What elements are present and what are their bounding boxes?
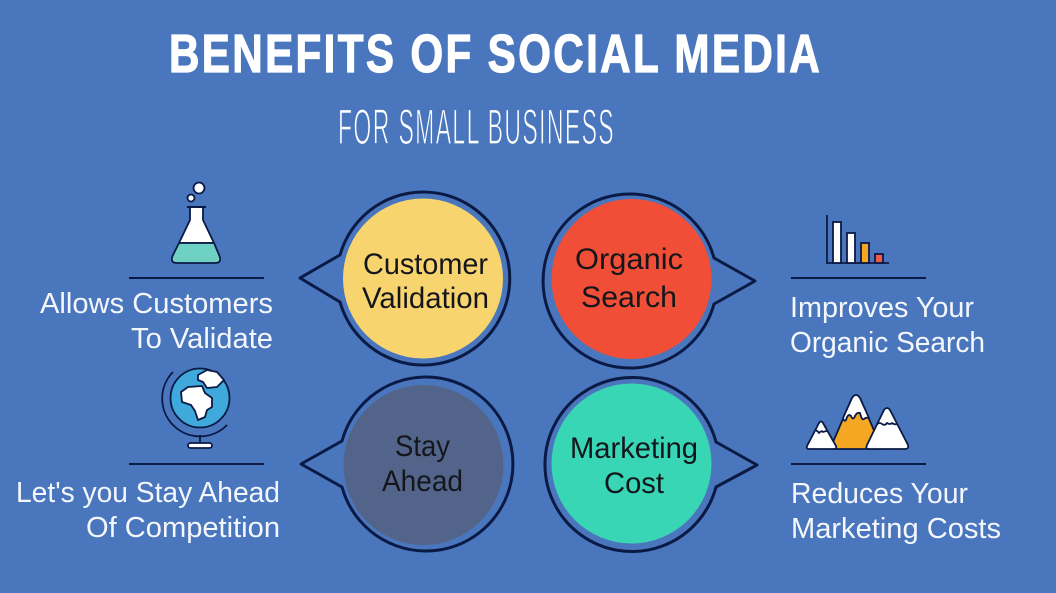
panel: organic search bubble: Search xyxy=(581,281,677,314)
text: lets you stay ahead of competition xyxy=(16,463,280,544)
text: lets you stay ahead of competition: Let's you Stay Ahead xyxy=(16,477,280,509)
text: improves your organic search: Improves Your xyxy=(790,292,974,324)
panel: customer validation bubble xyxy=(300,192,510,365)
panel: marketing cost bubble: Cost xyxy=(604,467,665,500)
text: reduces your marketing costs xyxy=(791,463,1001,545)
text: improves your organic search xyxy=(790,277,985,359)
icon: bar chart xyxy=(827,215,889,263)
text: improves your organic search: Organic Search xyxy=(790,327,985,359)
panel: marketing cost bubble: Marketing xyxy=(570,432,698,465)
panel: stay ahead bubble: Stay xyxy=(395,430,450,463)
text: FOR SMALL BUSINESS xyxy=(338,99,615,155)
text: reduces your marketing costs: Reduces Your xyxy=(791,478,968,510)
panel: stay ahead bubble: Ahead xyxy=(382,465,463,498)
panel: customer validation bubble: Validation xyxy=(362,282,489,315)
panel: customer validation bubble: Customer xyxy=(363,248,488,281)
text: allows customers to validate xyxy=(40,277,273,355)
panel: organic search bubble xyxy=(543,194,755,368)
panel: organic search bubble: Organic xyxy=(575,243,683,276)
icon: globe xyxy=(162,368,230,448)
text: allows customers to validate: To Validate xyxy=(131,323,273,355)
text: allows customers to validate: Allows Customers xyxy=(40,288,273,320)
icon: flask xyxy=(172,182,220,263)
panel: marketing cost bubble xyxy=(545,378,757,552)
panel: stay ahead bubble xyxy=(301,377,513,551)
text: lets you stay ahead of competition: Of Competition xyxy=(86,512,280,544)
title: BENEFITS OF SOCIAL MEDIA xyxy=(169,24,822,84)
icon: mountains xyxy=(807,395,908,449)
text: reduces your marketing costs: Marketing Costs xyxy=(791,513,1001,545)
